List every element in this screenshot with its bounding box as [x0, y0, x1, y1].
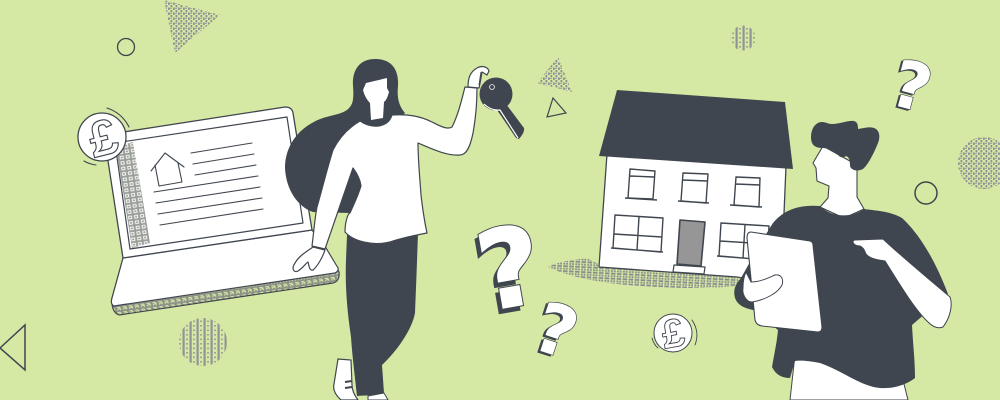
man with tablet	[734, 121, 951, 400]
woman holding keys	[285, 59, 524, 400]
listing house icon	[151, 153, 184, 186]
decorative patterned triangle top	[164, 0, 220, 53]
lower right window	[717, 223, 769, 260]
upper windows	[625, 169, 762, 207]
decorative outline circle top-left	[118, 38, 134, 56]
house	[599, 90, 793, 285]
door	[677, 220, 705, 266]
man neck and face	[813, 146, 864, 218]
question mark large: ?	[468, 203, 552, 337]
question mark top right: ?	[884, 47, 939, 128]
woman right hand	[468, 67, 489, 88]
lower left window	[611, 215, 663, 252]
decorative outline triangle left	[0, 325, 25, 370]
house walls	[599, 154, 786, 285]
decorative patterned circle right	[958, 137, 1000, 189]
house ground shadow	[548, 258, 740, 288]
woman trousers	[346, 233, 418, 396]
question mark large: ?	[465, 207, 548, 341]
decorative outline circle right	[915, 182, 937, 204]
pound coin large: £	[83, 107, 124, 169]
laptop lid	[104, 107, 312, 258]
decorative patterned circle bottom-left	[179, 318, 227, 366]
key	[479, 72, 524, 139]
man hair	[811, 121, 879, 170]
decorative outline triangle centre	[547, 98, 566, 117]
man t-shirt	[734, 206, 948, 388]
question mark large: ?	[468, 203, 552, 337]
question mark top right: ?	[884, 47, 939, 128]
decorative patterned circle top centre	[730, 26, 756, 50]
woman far foot	[368, 393, 388, 400]
man hand on tablet	[743, 272, 783, 302]
listing text lines	[154, 143, 263, 225]
woman face and neck	[363, 78, 389, 120]
man trousers	[790, 355, 908, 400]
man pointing arm	[853, 239, 951, 328]
laptop base	[111, 230, 339, 315]
laptop	[104, 107, 339, 315]
question mark small centre: ?	[525, 288, 587, 375]
woman hair	[285, 59, 405, 213]
woman near foot	[334, 359, 358, 400]
tablet	[747, 232, 822, 332]
woman left hand on laptop	[293, 247, 325, 272]
question mark small centre: ?	[525, 288, 587, 375]
question mark top right: ?	[882, 48, 937, 129]
laptop screen	[115, 117, 303, 249]
pound coin small: £	[658, 310, 688, 358]
question mark small centre: ?	[522, 289, 584, 377]
decorative patterned triangle centre	[537, 57, 572, 92]
pound coin small	[652, 310, 697, 358]
door step	[673, 265, 705, 274]
woman sweater	[312, 87, 477, 249]
house roof	[599, 90, 793, 169]
